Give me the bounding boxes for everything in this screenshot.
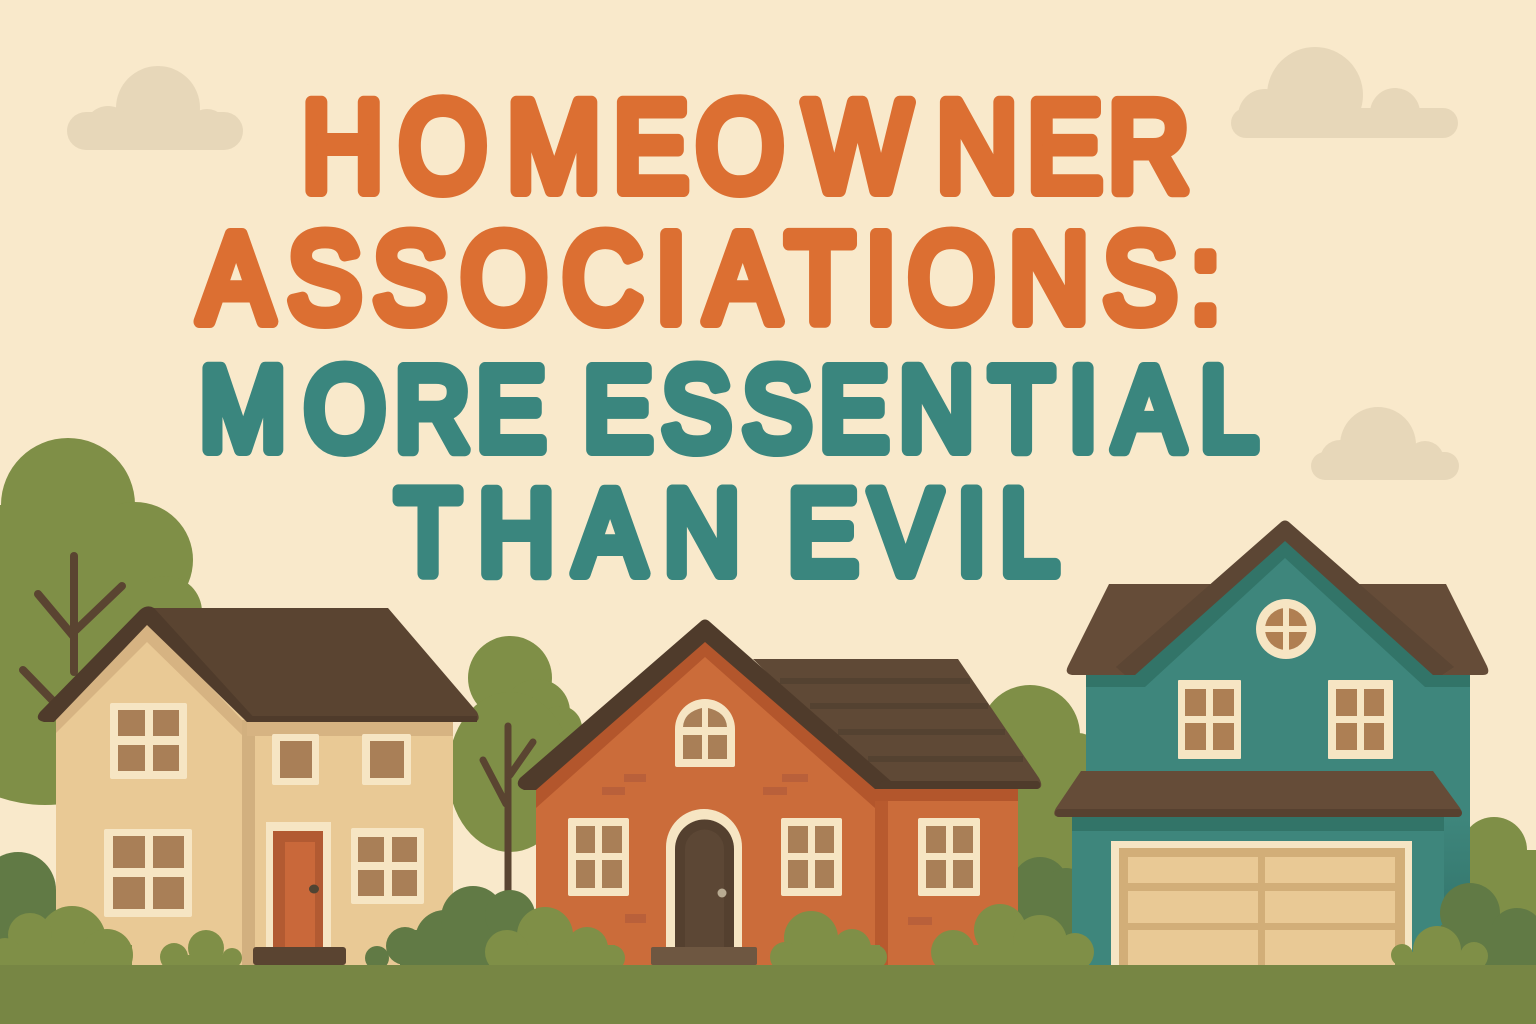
brick house roof — [518, 620, 1041, 790]
porch roof — [1054, 771, 1462, 817]
bush: right dark — [1440, 883, 1536, 965]
door: red — [266, 822, 331, 948]
title line: Homeowner: HOMEOWNER — [302, 75, 1189, 218]
tree: behind right house — [980, 685, 1100, 905]
bush: beige house left — [0, 906, 133, 981]
bush: right light — [1461, 817, 1536, 965]
cloud: top left — [67, 66, 243, 154]
beige house roof — [38, 606, 479, 722]
bush: dark far left — [0, 852, 56, 965]
bush: right of garage — [1391, 926, 1488, 974]
bush: dark between houses — [365, 886, 535, 970]
brick house walls — [536, 635, 1018, 965]
teal house side roofs — [1067, 584, 1488, 675]
cloud: top right — [1231, 47, 1458, 143]
bare tree middle — [483, 726, 533, 895]
window: upper middle — [272, 734, 319, 785]
title line: More Essential: MORE ESSENTIAL — [200, 342, 1258, 475]
bush: beige house centre — [160, 930, 242, 971]
bush: brick house centre — [770, 911, 887, 972]
house: beige two-storey — [38, 606, 479, 965]
window: lower left — [104, 829, 192, 917]
window: right — [918, 818, 980, 896]
brick marks — [602, 774, 932, 925]
arched door — [666, 809, 742, 947]
tree: far left — [0, 438, 202, 805]
beige house walls — [56, 620, 453, 965]
title — [199, 75, 1258, 599]
window: upper right — [362, 734, 411, 785]
doorstep — [253, 947, 346, 965]
window: middle — [781, 818, 842, 896]
cloud: middle right — [1311, 407, 1459, 483]
title line: Associations: ASSOCIATIONS: — [199, 209, 1221, 349]
house: brick — [518, 620, 1041, 965]
bush: dark behind right house — [1012, 857, 1090, 965]
arched attic window — [675, 699, 735, 767]
teal house gable band — [1116, 520, 1454, 675]
tree: between houses — [448, 636, 582, 852]
bush: brick house right — [931, 904, 1094, 974]
title line: Than Evil: THAN EVIL — [396, 465, 1059, 599]
garage door — [1111, 841, 1412, 965]
lawn — [0, 965, 1536, 1024]
doorstep — [651, 947, 757, 965]
bush: brick house left — [485, 907, 625, 974]
window: lower right — [351, 828, 424, 904]
house: teal with garage — [1054, 520, 1488, 965]
bare tree left — [23, 556, 122, 702]
window: left — [568, 818, 629, 896]
window: upper left — [1178, 680, 1241, 759]
window: upper right — [1328, 680, 1393, 759]
round attic window — [1256, 599, 1316, 659]
window: upper left — [110, 703, 187, 779]
teal house walls — [1072, 535, 1470, 965]
